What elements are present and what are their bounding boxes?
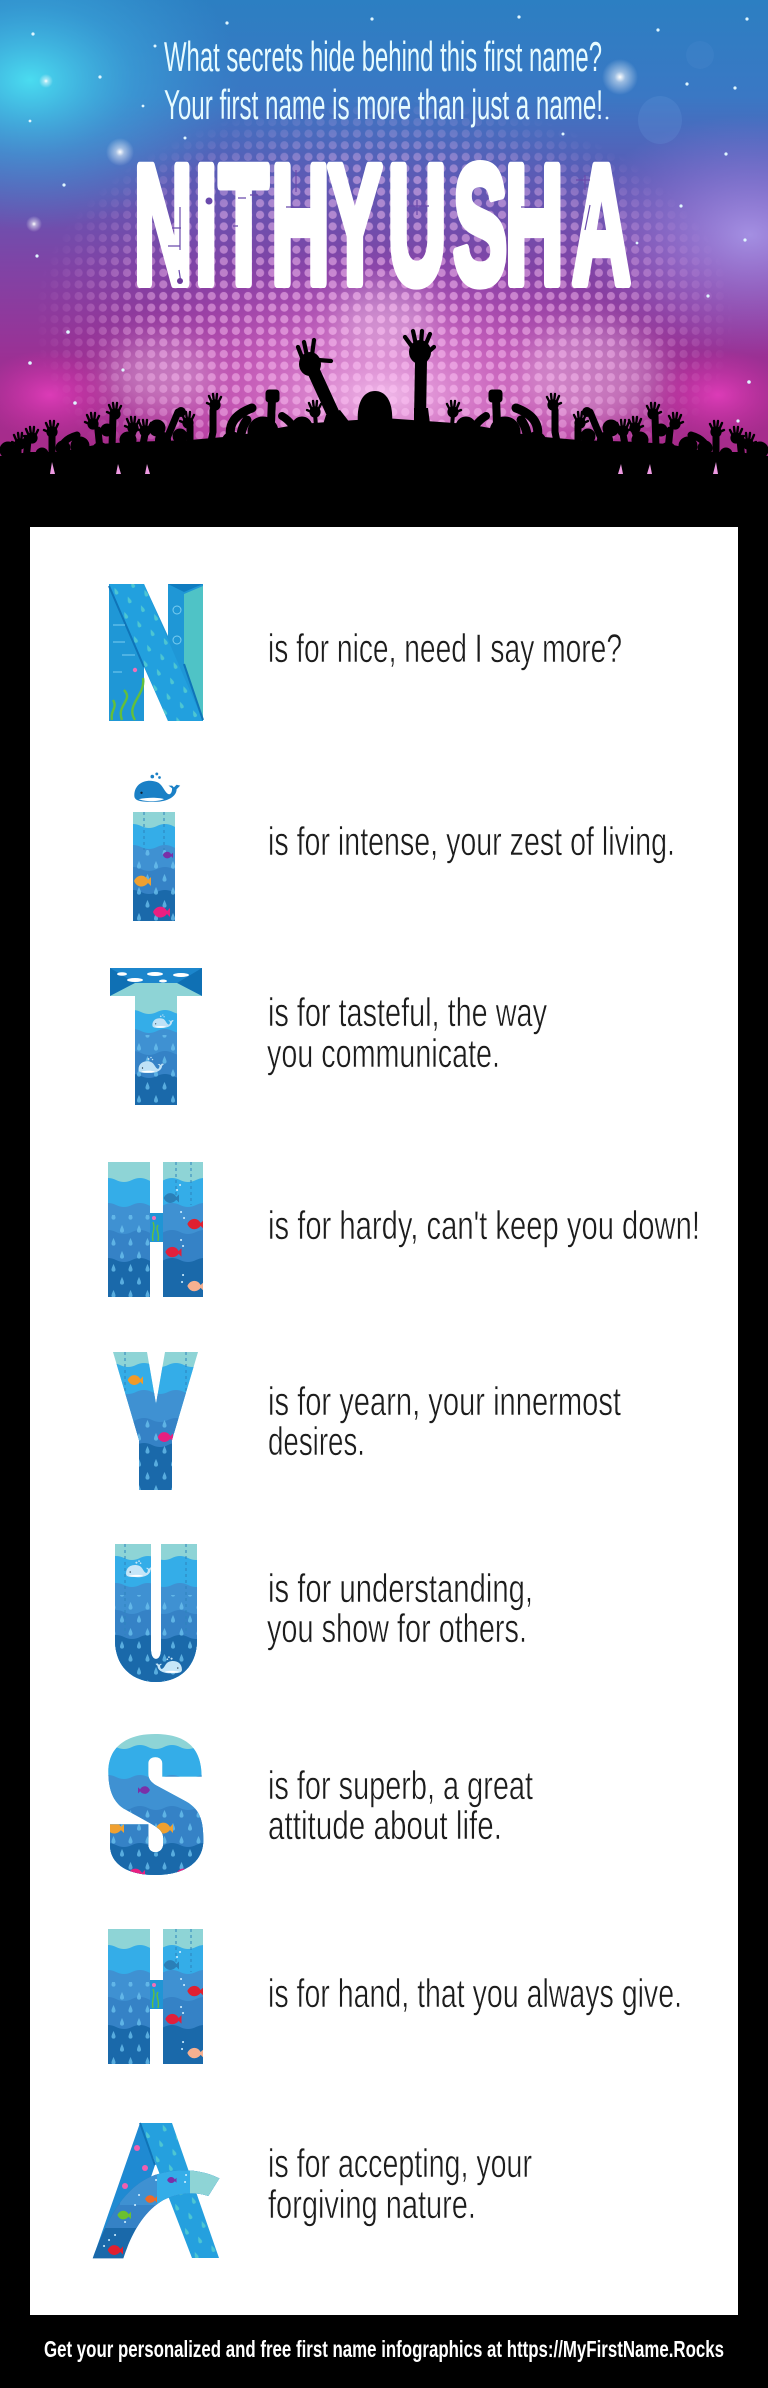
text: A [268,2142,532,2227]
letter H art [100,1162,212,1430]
letter N art [109,584,203,721]
text: S [268,1764,533,1848]
crowd silhouette [0,390,768,530]
headline question lines [164,33,603,128]
text: U: is for understanding, [268,1567,533,1611]
white content panel [30,527,738,2315]
text: Y [268,1380,621,1464]
text: A: is for accepting, your [268,2142,532,2186]
text: S: is for superb, a great [268,1764,533,1808]
text: U: you show for others. [267,1607,527,1651]
letter A art [92,2122,220,2258]
text: N: is for nice, need I say more? [268,627,622,671]
lead fan with raised hands [298,331,434,440]
letter S art [108,1734,204,1875]
text: S: attitude about life. [268,1804,502,1848]
letter H art repeated [100,1929,212,2197]
letter I art with whale [133,772,180,921]
text: A: forgiving nature. [268,2183,476,2227]
text: T: is for tasteful, the way [268,991,547,1035]
text: T [267,991,547,1076]
text: Y: desires. [268,1420,365,1464]
text: U [267,1567,533,1651]
text: T: you communicate. [267,1032,500,1076]
letter Y art [113,1352,198,1490]
sparkles [26,15,751,423]
letter U art [115,1544,197,1682]
text: Y: is for yearn, your innermost [268,1380,621,1424]
name title: NITHYUSHA [134,131,631,320]
header stage background with lights [0,0,768,456]
letter T art [110,968,202,1105]
